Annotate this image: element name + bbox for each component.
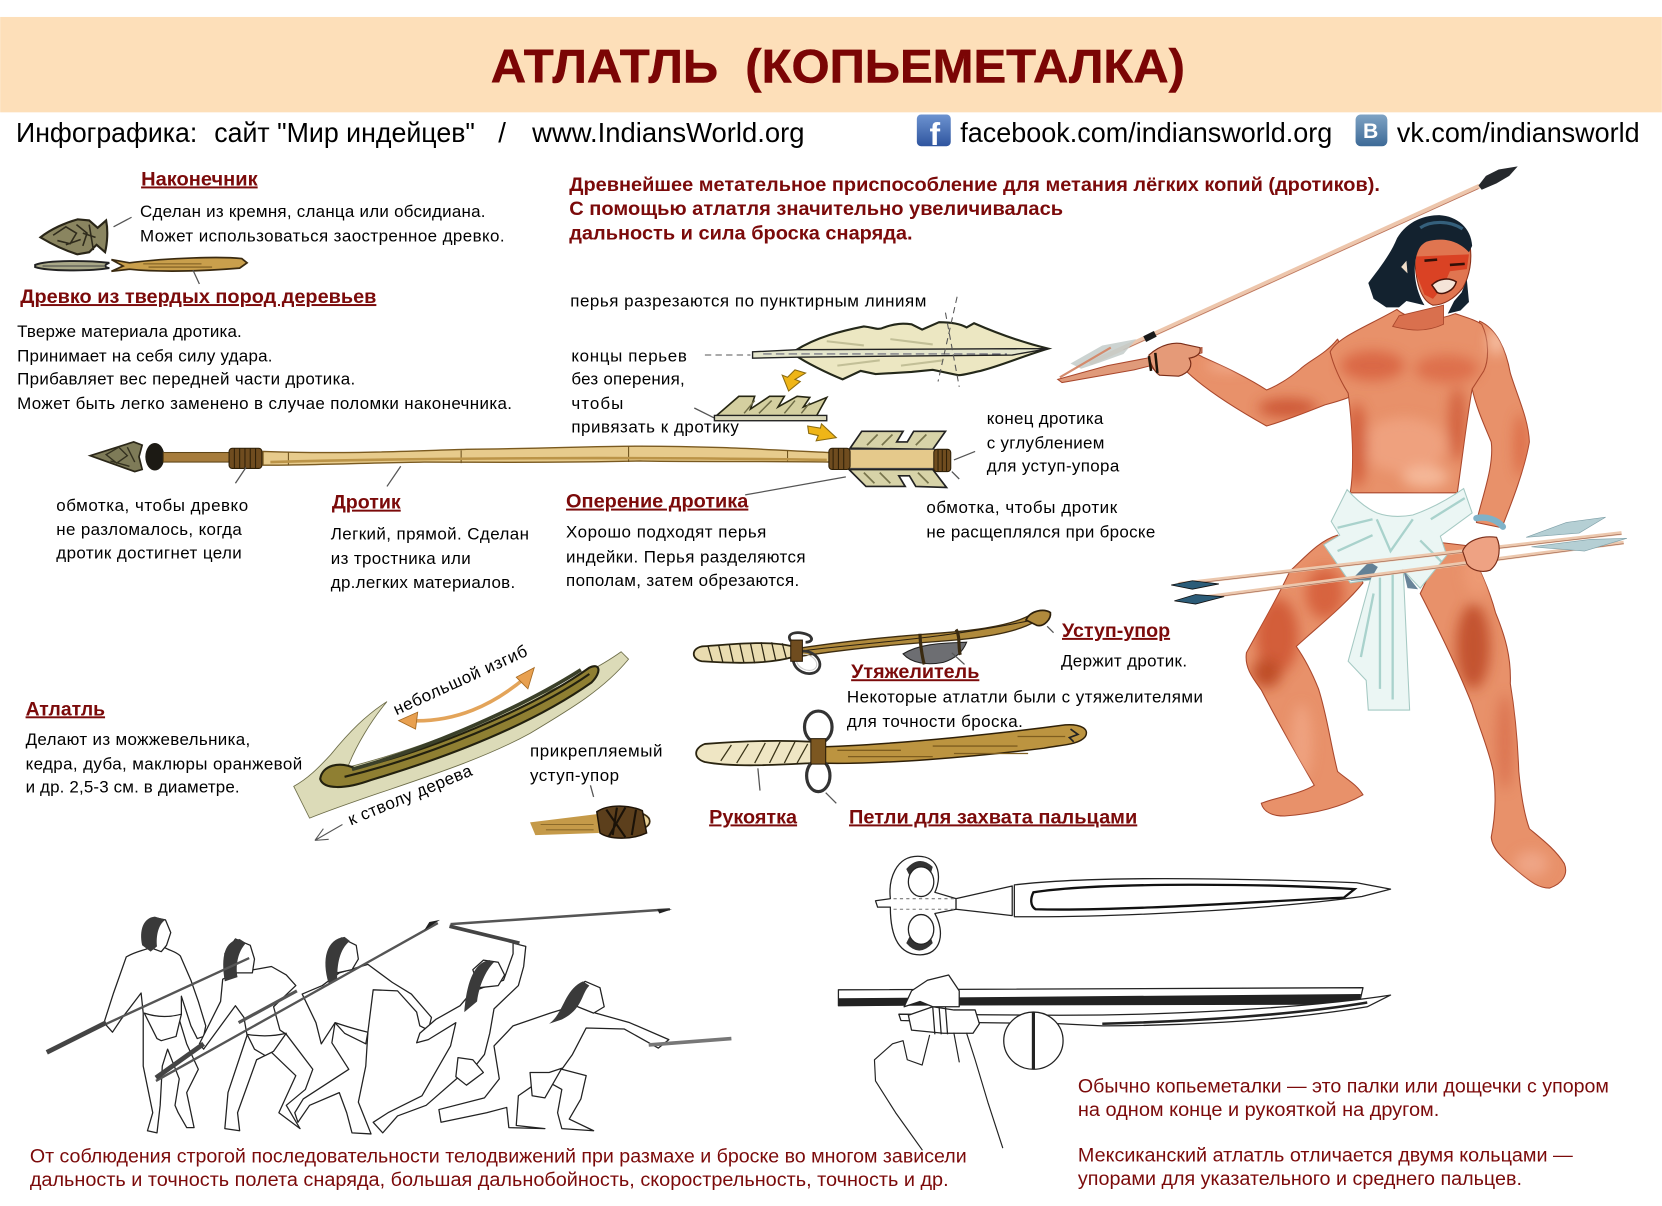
- feather annotations: концы перьев: [571, 346, 687, 365]
- text: usual and mexican atlatl: упорами для указательного и среднего пальцев.: [1078, 1168, 1522, 1190]
- spear: [1060, 166, 1518, 377]
- block: hardwood foreshaft text: [17, 286, 512, 413]
- credits line: facebook.com/indiansworld.org: [960, 117, 1332, 148]
- attachable spur: прикрепляемый: [530, 742, 662, 761]
- throwing sequence line art: [47, 909, 731, 1134]
- block: arrowhead: [35, 168, 505, 284]
- dart annotations: не расщеплялся при броске: [926, 522, 1155, 541]
- arrow: yellow right: [808, 424, 836, 441]
- figure 3: [295, 937, 431, 1134]
- icon: turkey feather: [705, 297, 1048, 387]
- text: body movement: От соблюдения строгой последовательности телодвижений при размахе и броске во многом зависели: [30, 1146, 967, 1168]
- text: usual and mexican atlatl: Обычно копьеметалки — это палки или дощечки с упором: [1078, 1076, 1609, 1098]
- heading: dart: Дротик: [332, 492, 401, 514]
- arrow: to trunk: [315, 824, 342, 840]
- block: hardwood foreshaft text: Прибавляет вес передней части дротика.: [17, 370, 355, 389]
- figure 4: [373, 943, 526, 1133]
- dart annotations: для уступ-упора: [987, 457, 1120, 476]
- credits line: vk.com/indiansworld: [1397, 117, 1640, 148]
- finger loops: [805, 711, 832, 743]
- torso: [1330, 309, 1488, 493]
- icon: cut feather piece: [714, 396, 827, 421]
- label: handle: Рукоятка: [709, 806, 798, 828]
- credits line: сайт "Мир индейцев": [214, 117, 475, 148]
- icon: stone arrowhead: [40, 219, 107, 254]
- feather annotations: [570, 291, 926, 436]
- wrapped handle: [694, 643, 793, 663]
- icon: hardwood foreshaft: [35, 258, 247, 271]
- feather annotations: чтобы: [571, 394, 623, 413]
- label: slight bend: небольшой изгиб: [390, 641, 530, 719]
- credits line: [16, 114, 1640, 152]
- figure 1: [104, 917, 206, 1133]
- text: body movement: [30, 1146, 967, 1191]
- fletching: [850, 431, 945, 449]
- credits line: /: [498, 117, 506, 148]
- finger loops: [789, 633, 812, 642]
- hook: [1026, 610, 1050, 626]
- block: dart: из тростника или: [331, 549, 471, 568]
- icon: branch with atlatl blank: [294, 652, 629, 818]
- block: hardwood foreshaft text: Тверже материала дротика.: [17, 322, 242, 341]
- label: weight: для точности броска.: [847, 712, 1023, 731]
- credits line: www.IndiansWorld.org: [531, 117, 805, 148]
- intro text: Древнейшее метательное приспособление для метания лёгких копий (дротиков).: [569, 175, 1380, 196]
- credits line: Инфографика:: [16, 117, 197, 148]
- block: dart: Легкий, прямой. Сделан: [331, 524, 529, 543]
- back leg: [1420, 543, 1566, 888]
- grip: [908, 1007, 979, 1033]
- right arm: [1472, 321, 1529, 528]
- label: spur: Держит дротик.: [1061, 652, 1187, 671]
- hand on atlatl: [1149, 343, 1200, 376]
- label: to the tree trunk: к стволу дерева: [345, 761, 475, 829]
- icon: vk: [1356, 114, 1387, 146]
- block: fletching: [566, 491, 806, 590]
- front leg: [1246, 535, 1363, 816]
- block: fletching: пополам, затем обрезаются.: [566, 571, 799, 590]
- block: fletching: индейки. Перья разделяются: [566, 548, 806, 567]
- figure 5: [439, 981, 669, 1131]
- atlatl with weight: [694, 610, 1050, 678]
- feather annotations: без оперения,: [571, 370, 685, 389]
- bracelet: [1476, 518, 1503, 527]
- attachable spur: [530, 742, 662, 838]
- muscle shading: [1206, 327, 1548, 876]
- heading: fletching: Оперение дротика: [566, 491, 749, 513]
- block: hardwood foreshaft text: Может быть легко заменено в случае поломки наконечника.: [17, 394, 512, 413]
- intro text: С помощью атлатля значительно увеличивалась: [569, 199, 1063, 220]
- icon: facebook: f: [930, 116, 941, 152]
- title: АТЛАТЛЬ (КОПЬЕМЕТАЛКА): [491, 41, 1185, 94]
- arrows: [1179, 533, 1624, 600]
- title band: [0, 17, 1662, 112]
- assembled dart: [90, 431, 951, 487]
- arrow: yellow down: [782, 370, 806, 391]
- text: usual and mexican atlatl: на одном конце и рукояткой на другом.: [1078, 1099, 1439, 1121]
- wrapped handle: [696, 741, 814, 765]
- mexican atlatl, top view: [876, 856, 1391, 955]
- arrow: slight curve: [409, 678, 525, 721]
- dart annotations: с углублением: [987, 433, 1104, 452]
- atlatl with finger loops: [696, 711, 1086, 792]
- stone weight: [903, 642, 967, 664]
- text: usual and mexican atlatl: Мексиканский атлатль отличается двумя кольцами —: [1078, 1144, 1573, 1166]
- attachable spur: уступ-упор: [530, 766, 619, 785]
- warrior illustration: [1058, 166, 1627, 888]
- gripping hand: [1463, 537, 1499, 571]
- text: body movement: дальность и точность полета снаряда, большая дальнобойность, скорострельность, точность и др.: [30, 1169, 949, 1191]
- wrapping: [229, 448, 262, 468]
- block: atlatl: кедра, дуба, маклюры оранжевой: [26, 754, 302, 773]
- mexican atlatl, side view in hand: [838, 975, 1391, 1150]
- atlatl in hand: [1058, 348, 1202, 383]
- intro text: дальность и сила броска снаряда.: [569, 224, 913, 245]
- icon: vk: В: [1363, 120, 1378, 143]
- label: weight: [847, 661, 1203, 731]
- dart annotations: не разломалось, когда: [56, 520, 242, 539]
- label: weight: Утяжелитель: [851, 661, 979, 683]
- dart annotations: [56, 409, 1155, 562]
- heading: foreshaft: Древко из твердых пород деревьев: [20, 286, 376, 308]
- hand: [904, 975, 959, 1007]
- feather annotations: перья разрезаются по пунктирным линиям: [570, 291, 926, 310]
- heading: arrowhead: Наконечник: [141, 168, 258, 190]
- text: usual and mexican atlatl: [1078, 1076, 1609, 1190]
- left arm: [1150, 339, 1362, 426]
- block: dart: др.легких материалов.: [331, 573, 515, 592]
- darts and throwers: [47, 958, 249, 1051]
- figure 2: [199, 939, 313, 1131]
- label: finger loops: Петли для захвата пальцами: [849, 806, 1137, 828]
- intro text: [569, 175, 1380, 245]
- dart annotations: обмотка, чтобы древко: [56, 496, 248, 515]
- block: atlatl: [26, 698, 302, 797]
- block: hardwood foreshaft text: Принимает на себя силу удара.: [17, 346, 273, 365]
- hair: [1368, 215, 1472, 307]
- icon: facebook: [917, 114, 951, 152]
- block: arrowhead: Сделан из кремня, сланца или обсидиана.: [140, 202, 486, 221]
- heading: atlatl: Атлатль: [26, 698, 105, 720]
- block: dart: [331, 492, 529, 592]
- dart shaft: [263, 446, 830, 465]
- forearm: [874, 1033, 1003, 1150]
- label: spur: Уступ-упор: [1062, 620, 1170, 642]
- dart annotations: дротик достигнет цели: [56, 543, 242, 562]
- label: spur: [1061, 620, 1187, 671]
- head: [1368, 215, 1472, 330]
- block: atlatl: Делают из можжевельника,: [26, 730, 250, 749]
- block: atlatl: и др. 2,5-3 см. в диаметре.: [26, 778, 240, 797]
- loincloth: [1324, 489, 1472, 710]
- dart annotations: обмотка, чтобы дротик: [926, 498, 1118, 517]
- block: fletching: Хорошо подходят перья: [566, 522, 766, 541]
- label: weight: Некоторые атлатли были с утяжелителями: [847, 688, 1203, 707]
- stone weight: [1004, 1012, 1063, 1069]
- stone point: [90, 442, 142, 472]
- block: arrowhead: Может использоваться заостренное древко.: [140, 227, 505, 246]
- dart annotations: конец дротика: [987, 409, 1104, 428]
- feather annotations: привязать к дротику: [571, 417, 739, 436]
